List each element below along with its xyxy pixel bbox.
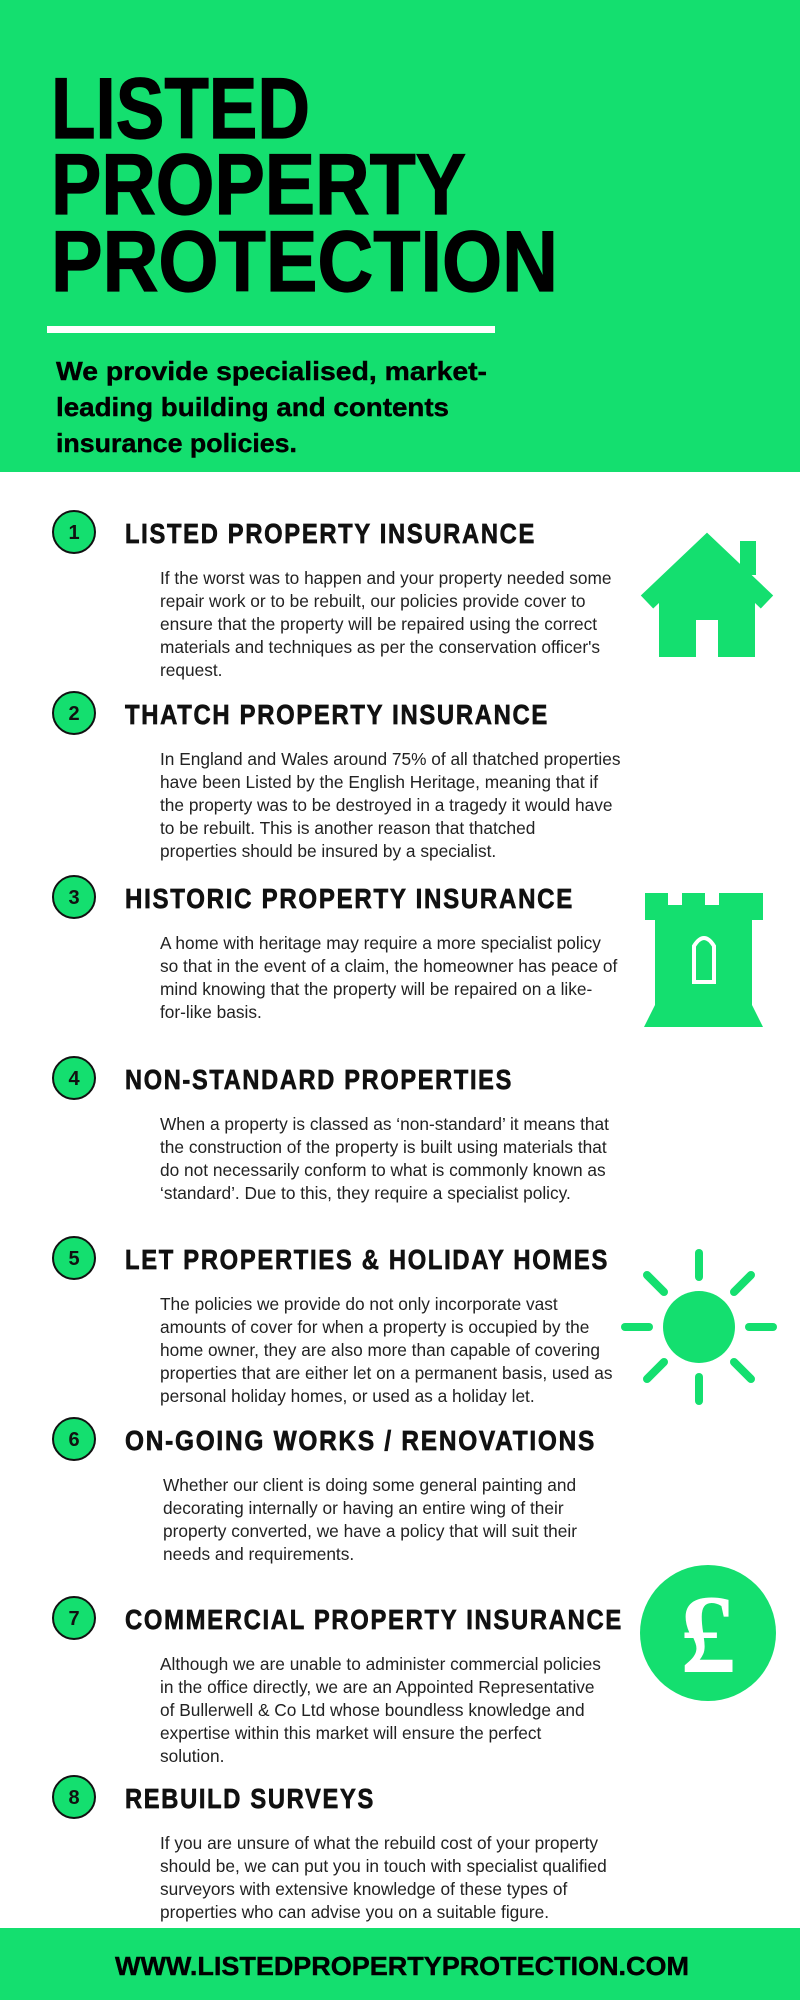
- section 1: 1: [68, 522, 80, 544]
- section 2: 2: [68, 703, 80, 725]
- section 8: [53, 1776, 607, 1922]
- subtitle: leading building and contents: [56, 392, 449, 422]
- section 8: properties who can advise you on a suitable figure.: [160, 1902, 549, 1922]
- section 2: properties should be insured by a specialist.: [160, 841, 496, 861]
- section 7: 7: [68, 1608, 80, 1630]
- section 7: Although we are unable to administer commercial policies: [160, 1654, 601, 1674]
- section 7: in the office directly, we are an Appointed Representative: [160, 1677, 595, 1697]
- section 4: When a property is classed as ‘non-standard’ it means that: [160, 1114, 609, 1134]
- section 8: surveyors with extensive knowledge of these types of: [160, 1879, 567, 1899]
- title: PROTECTION: [51, 214, 558, 310]
- icon: pound: [640, 1565, 776, 1701]
- section 3: mind knowing that the property will be repaired on a like-: [160, 979, 592, 999]
- section 3: so that in the event of a claim, the homeowner has peace of: [160, 956, 617, 976]
- section 6: 6: [68, 1429, 80, 1451]
- section 3: A home with heritage may require a more specialist policy: [160, 933, 601, 953]
- section 2: have been Listed by the English Heritage, meaning that if: [160, 772, 598, 792]
- section 1: ensure that the property will be repaired using the correct: [160, 614, 597, 634]
- section 2: In England and Wales around 75% of all thatched properties: [160, 749, 621, 769]
- footer: [0, 1928, 800, 2000]
- title: PROPERTY: [51, 137, 466, 233]
- section 6: ON-GOING WORKS / RENOVATIONS: [125, 1425, 596, 1456]
- icon: house: [647, 541, 767, 657]
- section 2: to be rebuilt. This is another reason that thatched: [160, 818, 535, 838]
- subtitle: [56, 356, 487, 458]
- section 1: repair work or to be rebuilt, our policies provide cover to: [160, 591, 586, 611]
- header panel: [0, 0, 800, 472]
- section 7: solution.: [160, 1746, 224, 1766]
- section 7: of Bullerwell & Co Ltd whose boundless knowledge and: [160, 1700, 585, 1720]
- section 5: home owner, they are also more than capable of covering: [160, 1340, 600, 1360]
- section 6: Whether our client is doing some general painting and: [163, 1475, 576, 1495]
- section 4: ‘standard’. Due to this, they require a specialist policy.: [160, 1183, 571, 1203]
- section 4: [53, 1057, 609, 1203]
- section 8: 8: [68, 1787, 80, 1809]
- section 8: If you are unsure of what the rebuild cost of your property: [160, 1833, 598, 1853]
- section 1: If the worst was to happen and your property needed some: [160, 568, 612, 588]
- icon: sun: [625, 1253, 773, 1401]
- section 6: needs and requirements.: [163, 1544, 354, 1564]
- section 4: 4: [68, 1068, 80, 1090]
- section 1: materials and techniques as per the conservation officer's: [160, 637, 600, 657]
- icon: castle tower: [644, 893, 763, 1027]
- section 1: [53, 511, 612, 680]
- subtitle: insurance policies.: [56, 428, 297, 458]
- section 3: for-like basis.: [160, 1002, 262, 1022]
- section 2: [53, 692, 621, 861]
- section 4: do not necessarily conform to what is commonly known as: [160, 1160, 606, 1180]
- title: [51, 61, 558, 310]
- section 7: [53, 1597, 623, 1766]
- section 3: 3: [68, 887, 80, 909]
- section 5: [53, 1237, 613, 1406]
- section 7: expertise within this market will ensure the perfect: [160, 1723, 542, 1743]
- section 3: HISTORIC PROPERTY INSURANCE: [125, 883, 574, 914]
- section 7: COMMERCIAL PROPERTY INSURANCE: [125, 1604, 623, 1635]
- subtitle: We provide specialised, market-: [56, 356, 487, 386]
- section 5: LET PROPERTIES & HOLIDAY HOMES: [125, 1244, 609, 1275]
- section 2: THATCH PROPERTY INSURANCE: [125, 699, 549, 730]
- section 5: personal holiday homes, or used as a holiday let.: [160, 1386, 535, 1406]
- section 5: 5: [68, 1248, 80, 1270]
- section 6: decorating internally or having an entire wing of their: [163, 1498, 564, 1518]
- section 4: NON-STANDARD PROPERTIES: [125, 1064, 513, 1095]
- section 5: amounts of cover for when a property is occupied by the: [160, 1317, 589, 1337]
- section 4: the construction of the property is built using materials that: [160, 1137, 607, 1157]
- icon: pound: £: [680, 1573, 736, 1697]
- section 8: REBUILD SURVEYS: [125, 1783, 375, 1814]
- footer: WWW.LISTEDPROPERTYPROTECTION.COM: [115, 1951, 689, 1981]
- section 1: LISTED PROPERTY INSURANCE: [125, 518, 536, 549]
- section 5: The policies we provide do not only incorporate vast: [160, 1294, 558, 1314]
- section 8: should be, we can put you in touch with specialist qualified: [160, 1856, 607, 1876]
- section 5: properties that are either let on a permanent basis, used as: [160, 1363, 613, 1383]
- section 2: the property was to be destroyed in a tragedy it would have: [160, 795, 612, 815]
- section 6: property converted, we have a policy that will suit their: [163, 1521, 577, 1541]
- section 1: request.: [160, 660, 222, 680]
- section 6: [53, 1418, 596, 1564]
- section 3: [53, 876, 617, 1022]
- title: LISTED: [51, 61, 310, 157]
